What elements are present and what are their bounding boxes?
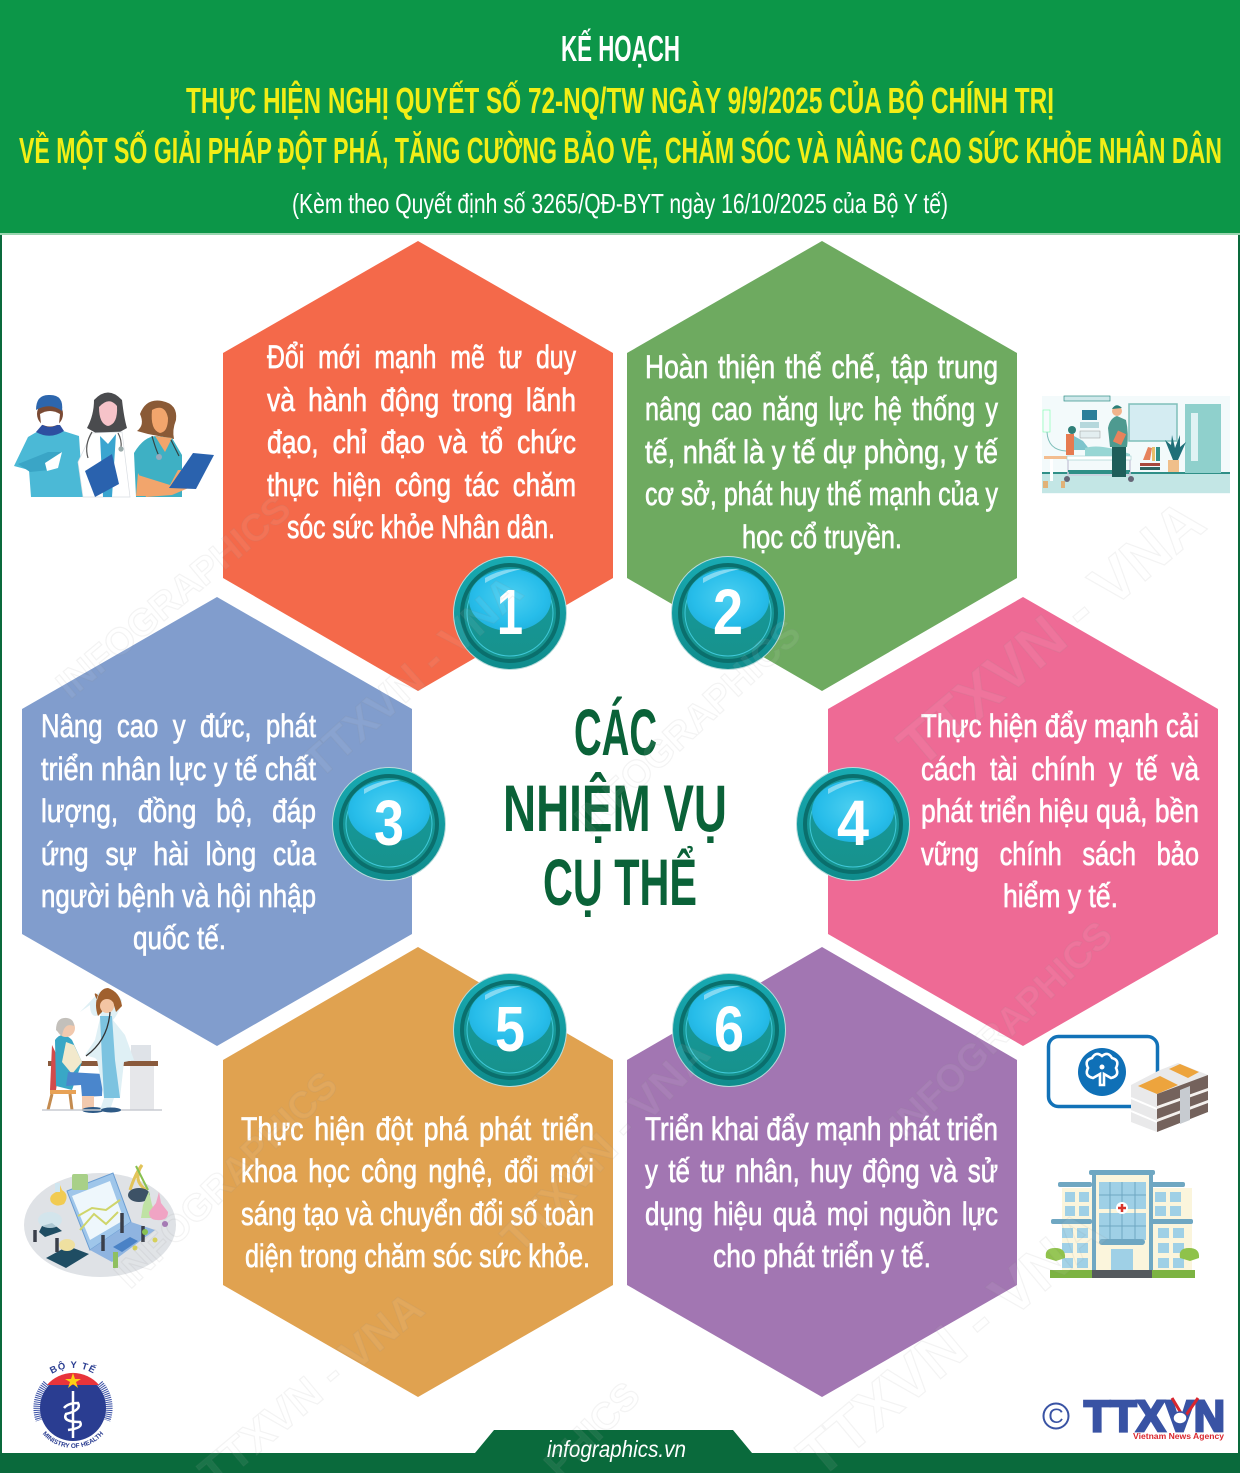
central heading: CÁC — [574, 695, 657, 769]
task 3 text — [41, 708, 316, 956]
badge 1 — [453, 556, 567, 670]
task 5 text: sáng tạo và chuyển đổi số toàn — [241, 1196, 594, 1232]
panel: task 5 — [223, 947, 613, 1397]
task 1 text: Đổi mới mạnh mẽ tư duy — [267, 339, 576, 375]
badge 4 — [796, 767, 910, 881]
logo: Ministry of Health: MINISTRY OF HEALTH — [42, 1431, 104, 1448]
logo: Ministry of Health — [33, 1361, 113, 1448]
subtitle: (Kèm theo Quyết định số 3265/QĐ-BYT ngày 16/10/2025 của Bộ Y tế) — [292, 188, 948, 219]
task 6 text: y tế tư nhân, huy động và sử — [645, 1153, 998, 1189]
task 5 text — [241, 1111, 594, 1274]
icon: science and technology — [24, 1165, 176, 1277]
panel: task 3 — [22, 597, 412, 1046]
badge 2: 2 — [713, 576, 743, 648]
task 6 text: cho phát triển y tế. — [713, 1238, 931, 1274]
task 5 text: Thực hiện đột phá phát triển — [241, 1111, 594, 1147]
badge 1: 1 — [497, 576, 523, 648]
footer site name: infographics.vn — [547, 1436, 686, 1462]
task 5 text: khoa học công nghệ, đổi mới — [241, 1153, 594, 1189]
watermarks: TTXVN - VNA — [492, 1029, 719, 1262]
icon: doctor and patient — [42, 988, 162, 1113]
task 6 text: Triển khai đẩy mạnh phát triển — [645, 1111, 998, 1147]
central heading: CỤ THỂ — [543, 845, 697, 919]
logo: TTXVN: C — [1048, 1405, 1064, 1428]
watermarks: INFOGRAPHICS — [567, 612, 809, 842]
header band — [0, 0, 1240, 235]
badge 3 — [332, 767, 446, 881]
central heading — [503, 695, 727, 919]
central heading: NHIỆM VỤ — [503, 771, 727, 845]
badge 5 — [453, 973, 567, 1087]
panel: task 6 — [627, 947, 1017, 1397]
task 4 text — [921, 708, 1199, 914]
badge 2 — [671, 556, 785, 670]
side border left — [0, 234, 2, 1459]
task 3 text: quốc tế. — [133, 920, 226, 956]
badge 5: 5 — [495, 993, 525, 1065]
watermarks: TTXVN - VNA — [885, 487, 1217, 780]
task 3 text: ứng sự hài lòng của — [41, 836, 316, 872]
logo: TTXVN: Vietnam News Agency — [1133, 1431, 1224, 1441]
watermarks: TTXVN - VNA — [294, 566, 532, 787]
logo: TTXVN: TTXVN — [1084, 1392, 1225, 1441]
side border right — [1238, 234, 1240, 1459]
task 2 text: nâng cao năng lực hệ thống y — [645, 391, 998, 427]
panel: task 4 — [828, 597, 1218, 1046]
task 1 text: sóc sức khỏe Nhân dân. — [287, 509, 555, 545]
task 1 text: thực hiện công tác chăm — [267, 467, 576, 503]
task 5 text: diện trong chăm sóc sức khỏe. — [245, 1238, 590, 1274]
task 3 text: người bệnh và hội nhập — [41, 878, 316, 914]
badge 6: 6 — [714, 993, 744, 1065]
task 1 text: và hành động trong lãnh — [267, 382, 576, 418]
footer band — [0, 1430, 1240, 1473]
icon: insurance card and money — [1048, 1036, 1208, 1132]
badge 6 — [672, 973, 786, 1087]
hexagon 1 — [223, 241, 613, 691]
task 4 text: hiểm y tế. — [1003, 878, 1118, 914]
hexagon 4 — [828, 597, 1218, 1046]
task 3 text: triển nhân lực y tế chất — [41, 751, 316, 787]
panel: task 1 — [223, 241, 613, 691]
task 3 text: lượng, đồng bộ, đáp — [41, 793, 316, 829]
hexagon 6 — [627, 947, 1017, 1397]
task 6 text: dụng hiệu quả mọi nguồn lực — [645, 1196, 998, 1232]
hexagon 2 — [627, 241, 1017, 691]
task 2 text: cơ sở, phát huy thế mạnh của y — [645, 476, 998, 512]
panel: task 2 — [627, 241, 1017, 691]
icon: medical staff — [14, 392, 214, 497]
task 1 text — [267, 339, 576, 545]
watermarks: INFOGRAPHICS — [49, 487, 299, 707]
logo: Ministry of Health: BỘ Y TẾ — [50, 1361, 97, 1374]
task 2 text: học cổ truyền. — [742, 519, 902, 555]
icon: hospital room — [1042, 396, 1230, 494]
task 2 text — [645, 349, 998, 555]
hexagon 5 — [223, 947, 613, 1397]
task 2 text: Hoàn thiện thể chế, tập trung — [645, 349, 998, 385]
badge 3: 3 — [374, 787, 404, 859]
title: plan: KẾ HOẠCH — [561, 28, 680, 69]
task 3 text: Nâng cao y đức, phát — [41, 708, 316, 744]
badge 4: 4 — [837, 787, 869, 859]
task 1 text: đạo, chỉ đạo và tổ chức — [267, 424, 576, 460]
icon: hospital building — [1046, 1170, 1199, 1278]
money stacks — [1131, 1063, 1208, 1132]
insurance emblem — [1078, 1048, 1126, 1096]
task 6 text — [645, 1111, 998, 1274]
watermarks: INFOGRAPHICS — [882, 914, 1121, 1146]
task 2 text: tế, nhất là y tế dự phòng, y tế — [645, 434, 998, 470]
watermarks: INFOGRAPHICS — [107, 1064, 346, 1296]
watermarks — [49, 487, 1217, 1473]
hexagon 3 — [22, 597, 412, 1046]
